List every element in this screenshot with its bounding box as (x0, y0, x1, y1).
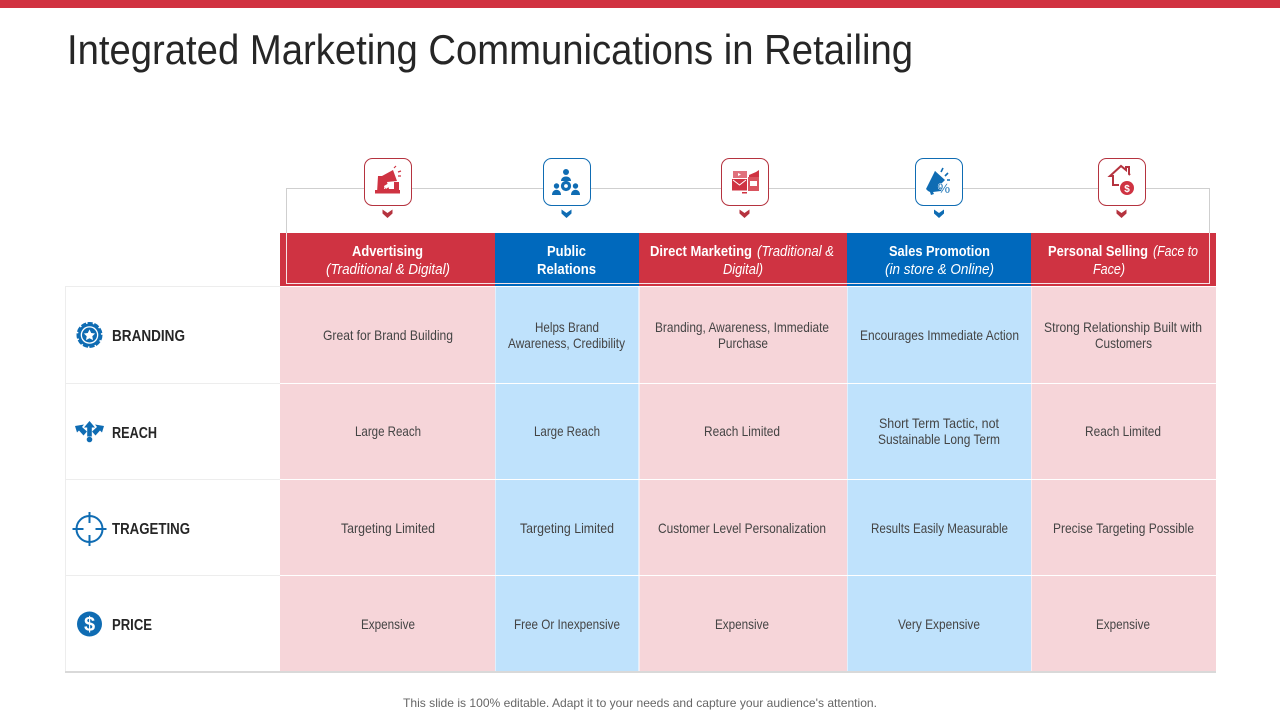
icon: reach arrows (75, 421, 104, 442)
row: targeting (65, 480, 1216, 575)
row: targeting: Results Easily Measurable (871, 520, 1008, 536)
top accent bar (0, 0, 1280, 8)
header: direct marketing: Direct Marketing (650, 243, 752, 260)
row: branding: Customers (1095, 335, 1152, 351)
row: branding: Great for Brand Building (323, 327, 453, 343)
header: personal selling: Personal Selling (1048, 243, 1148, 260)
title: Integrated Marketing Communications in Retailing (67, 26, 913, 73)
chevron (934, 210, 944, 218)
row: price: PRICE (112, 617, 152, 634)
header: personal selling (1031, 233, 1216, 286)
percent sign: % (938, 180, 951, 196)
row: reach: Large Reach (355, 423, 421, 439)
chevron (562, 210, 572, 218)
row: reach: Short Term Tactic, not (879, 415, 999, 431)
row: reach: REACH (112, 425, 157, 442)
header: public relations (495, 233, 639, 286)
icon: sales promotion (916, 158, 962, 218)
chevron (1116, 210, 1126, 218)
header: sales promotion: (in store & Online) (885, 261, 994, 278)
icon: personal selling: $ (1124, 184, 1130, 195)
header: personal selling: (Face to (1153, 243, 1198, 260)
header: advertising: Advertising (352, 243, 423, 260)
row: reach: Sustainable Long Term (878, 431, 1000, 447)
row: price: Expensive (361, 616, 415, 632)
row: price (65, 576, 1216, 671)
row: branding (65, 287, 1216, 383)
row: price: Expensive (715, 616, 769, 632)
row: price: Expensive (1096, 616, 1150, 632)
header: public relations: Relations (537, 261, 596, 278)
row: branding: Awareness, Credibility (508, 335, 625, 351)
icon: dollar coin: $ (84, 614, 95, 636)
row: branding: BRANDING (112, 328, 185, 345)
row: branding: Strong Relationship Built with (1044, 319, 1202, 335)
row: reach: Reach Limited (1085, 423, 1161, 439)
chevron (382, 210, 392, 218)
row: branding: Purchase (718, 335, 768, 351)
header: advertising: (Traditional & Digital) (326, 261, 450, 278)
row: targeting: Targeting Limited (520, 520, 614, 536)
row: reach: Large Reach (534, 423, 600, 439)
footer note: This slide is 100% editable. Adapt it to your needs and capture your audience's attention. (403, 696, 877, 710)
header: sales promotion (847, 233, 1031, 286)
header: advertising (280, 233, 495, 286)
row: targeting: Targeting Limited (341, 520, 435, 536)
row: targeting: Customer Level Personalization (658, 520, 826, 536)
icon: dollar coin (77, 612, 102, 636)
connector frame (286, 188, 1210, 284)
row: branding: Helps Brand (535, 319, 599, 335)
row: targeting: Precise Targeting Possible (1053, 520, 1194, 536)
icon: direct marketing (722, 158, 768, 218)
icon: crosshair (72, 512, 106, 546)
icon: branding badge (78, 324, 101, 346)
header: personal selling: Face) (1093, 261, 1125, 278)
row: branding: Encourages Immediate Action (860, 327, 1019, 343)
header: public relations: Public (547, 243, 586, 260)
row: branding: Branding, Awareness, Immediate (655, 319, 829, 335)
header: direct marketing: (Traditional & (757, 243, 834, 260)
header: sales promotion: Sales Promotion (889, 243, 990, 260)
row: targeting: TRAGETING (112, 521, 190, 538)
icon: public relations (544, 158, 590, 218)
row: price: Very Expensive (898, 616, 980, 632)
header: direct marketing: Digital) (723, 261, 763, 278)
icon: personal selling (1098, 158, 1146, 218)
icon: advertising (364, 158, 412, 218)
chevron (740, 210, 750, 218)
panel: column headers (280, 233, 1216, 286)
row: reach: Reach Limited (704, 423, 780, 439)
header: direct marketing (639, 233, 847, 286)
row: price: Free Or Inexpensive (514, 616, 620, 632)
row: reach (65, 384, 1216, 479)
